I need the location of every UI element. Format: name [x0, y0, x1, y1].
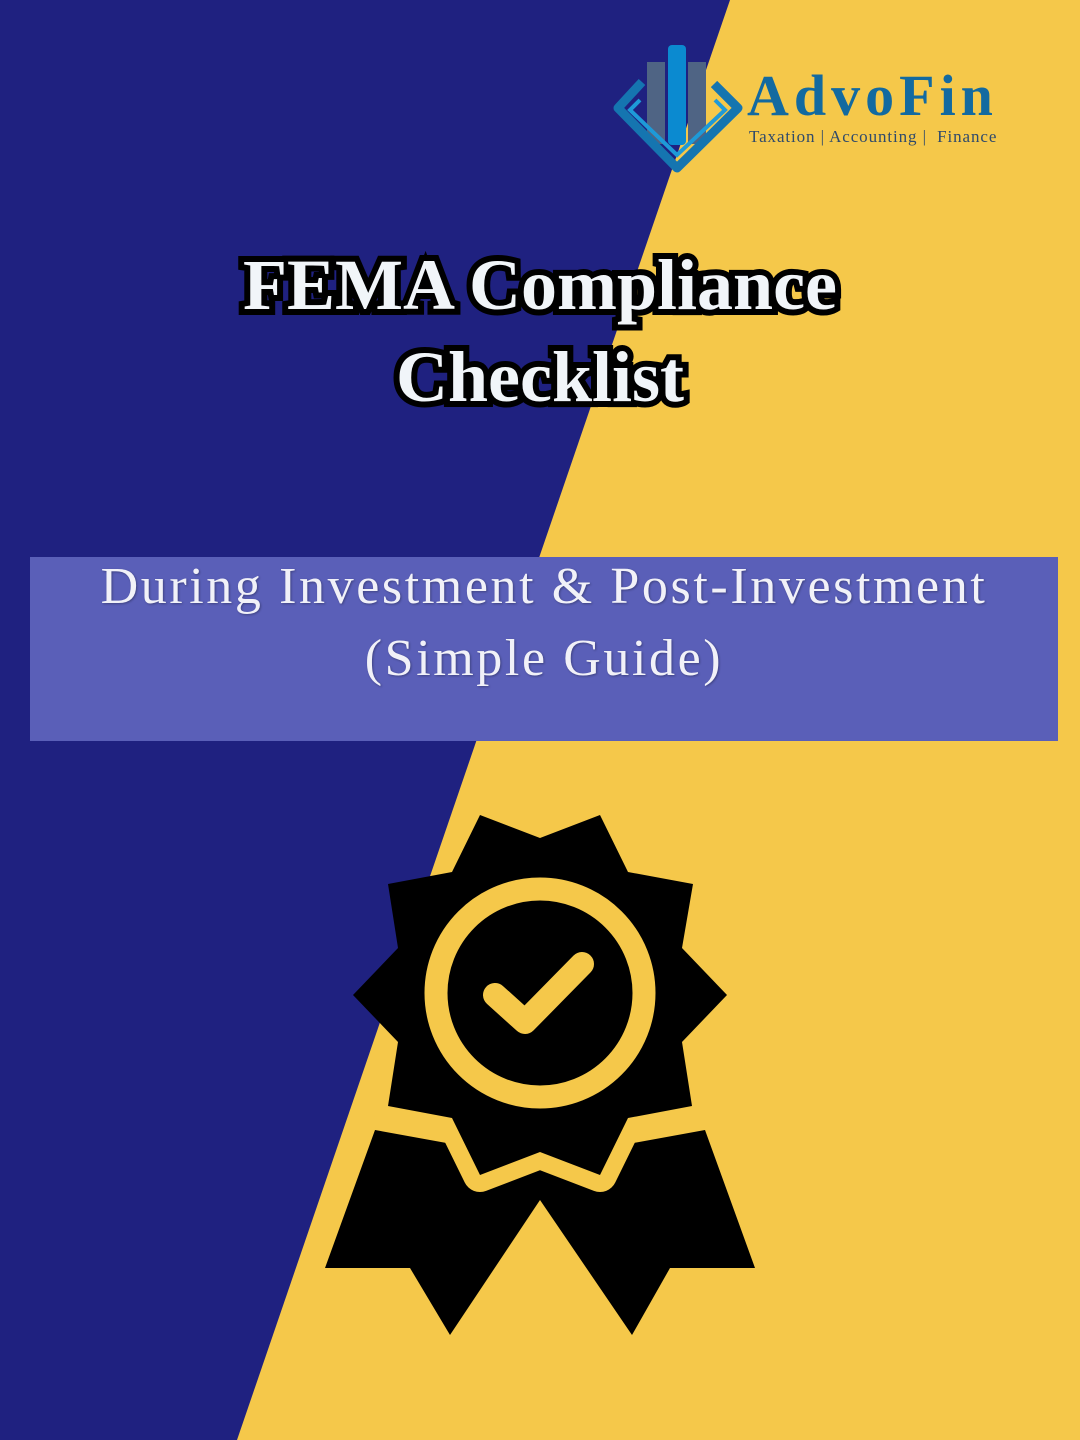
logo — [614, 45, 998, 172]
brand name: AdvoFin — [747, 63, 998, 128]
ribbons — [325, 1130, 755, 1335]
title — [238, 245, 842, 417]
title: Checklist — [396, 337, 684, 417]
title: FEMA Compliance — [243, 245, 837, 325]
icon: award badge — [325, 815, 755, 1335]
tagline: Taxation | Accounting | Finance — [749, 127, 997, 146]
banner: subtitle: (Simple Guide) — [365, 630, 723, 687]
banner: subtitle — [30, 557, 1058, 741]
banner: subtitle: During Investment & Post-Investment — [101, 558, 987, 615]
icon: logo mark — [614, 45, 742, 172]
